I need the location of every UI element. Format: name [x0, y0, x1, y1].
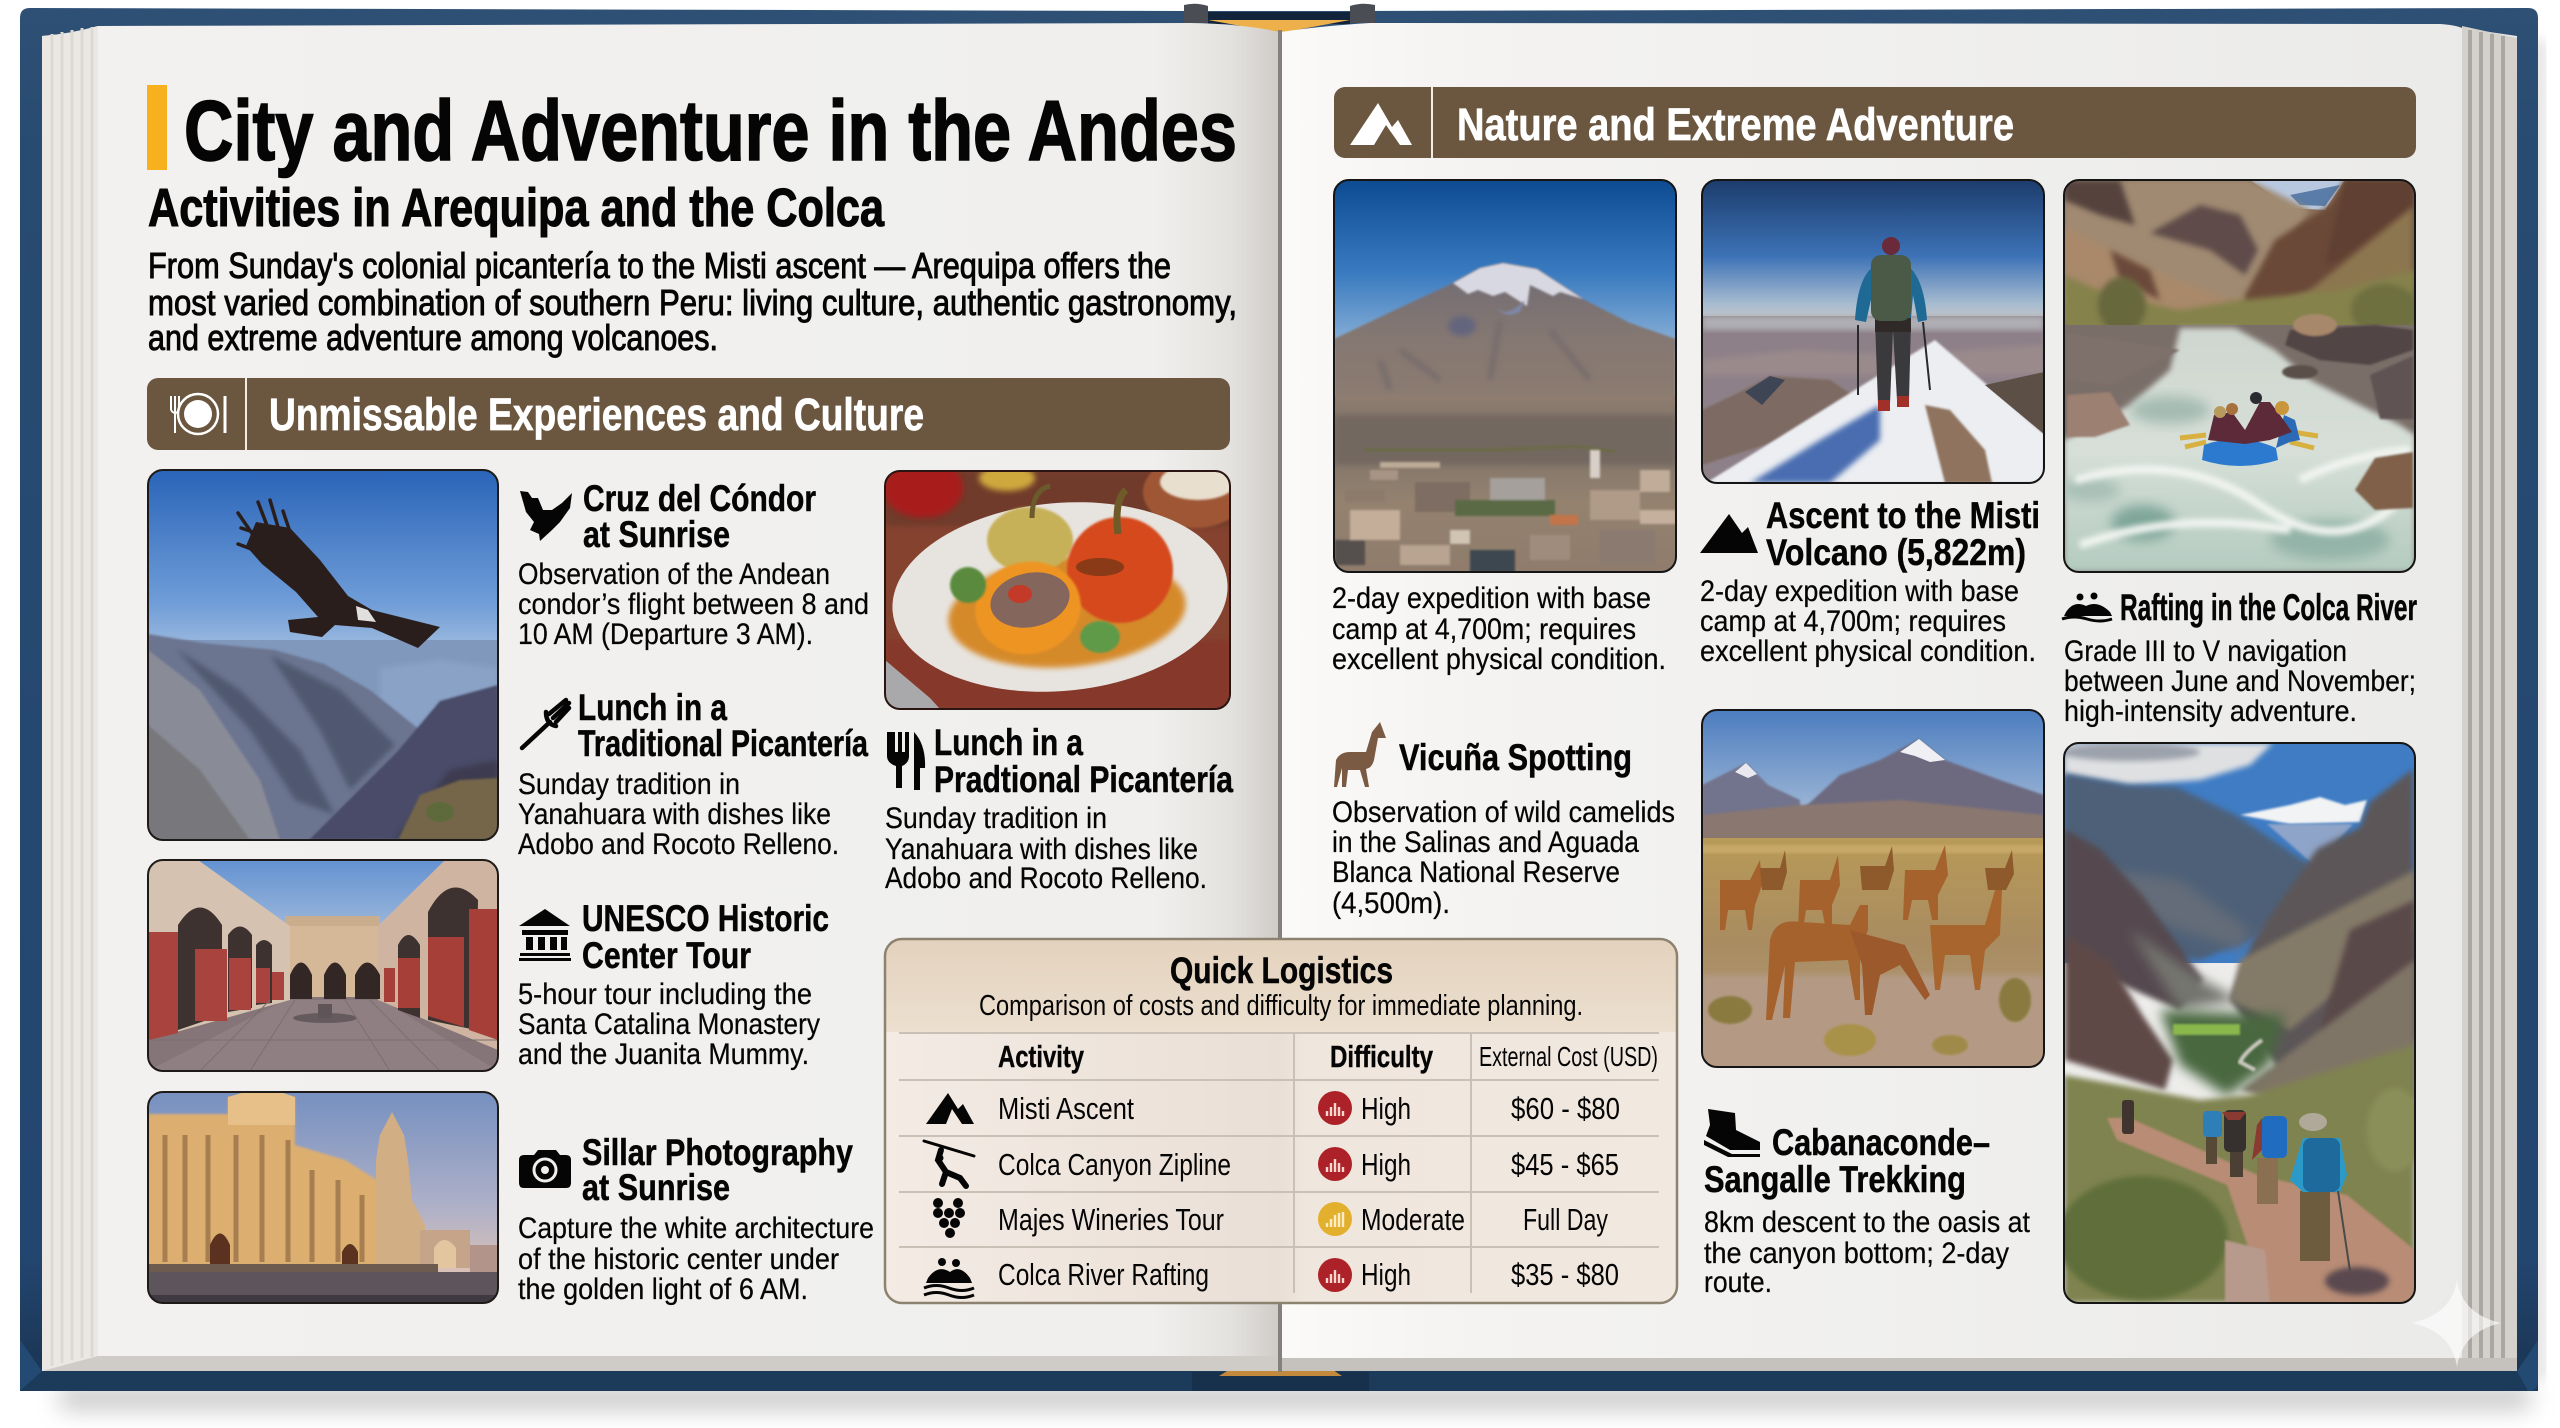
activity: Lunch in a Pradtional Picantería: Adobo and Rocoto Relleno. — [885, 862, 1207, 895]
table header row: Activity — [998, 1039, 1085, 1074]
activity: Ascent to the Misti Volcano — [1700, 495, 2040, 668]
activity: Ascent to the Misti Volcano: Ascent to the Misti — [1766, 495, 2040, 536]
sparkle watermark — [2412, 1280, 2501, 1367]
activity: Misti expedition description: excellent physical condition. — [1332, 643, 1666, 676]
activity: Lunch in a Pradtional Picantería: Yanahuara with dishes like — [885, 833, 1198, 866]
activity: Sillar Photography: the golden light of 6 AM. — [518, 1273, 808, 1306]
activity: UNESCO Historic Center Tour: Santa Catalina Monastery — [518, 1008, 820, 1041]
photo: monastery cloister — [148, 860, 498, 1071]
activity: Cruz del Cóndor: condor’s flight between 8 and — [518, 588, 869, 621]
activity: Vicuña Spotting: Blanca National Reserve — [1332, 856, 1620, 889]
section header: Nature and Extreme Adventure — [1334, 87, 2416, 158]
row: Colca Canyon Zipline: $45 - $65 — [1511, 1147, 1619, 1182]
panel: Quick Logistics table — [885, 939, 1677, 1303]
icon: grapes — [933, 1198, 965, 1238]
activity: Cabanaconde–Sangalle Trekking: 8km descent to the oasis at — [1704, 1206, 2031, 1239]
activity: Lunch in a Traditional Picantería: Adobo and Rocoto Relleno. — [518, 828, 839, 861]
activity: Misti expedition description — [1332, 582, 1666, 676]
icon: snow mountain — [1700, 514, 1758, 553]
activity: Lunch in a Traditional Picantería: Sunday tradition in — [518, 768, 740, 801]
activity: Ascent to the Misti Volcano: excellent physical condition. — [1700, 635, 2036, 668]
right arcade — [398, 888, 478, 1030]
activity: Cruz del Cóndor: Observation of the Andean — [518, 558, 830, 591]
icon: camera — [519, 1150, 571, 1188]
row: Colca Canyon Zipline: Colca Canyon Zipline — [998, 1147, 1231, 1182]
icon: condor — [520, 491, 572, 541]
icon: raft on waves — [924, 1258, 974, 1298]
activity: Ascent to the Misti Volcano: Volcano (5,822m) — [1766, 532, 2026, 573]
activity: Rafting in the Colca River: Rafting in the Colca River — [2120, 587, 2417, 628]
left arcade — [178, 908, 272, 1030]
row: Colca Canyon Zipline: High — [1361, 1147, 1411, 1182]
row: Colca River Rafting — [924, 1257, 1619, 1298]
activity: Cabanaconde–Sangalle Trekking: Sangalle Trekking — [1704, 1159, 1966, 1200]
intro paragraph: From Sunday's colonial picantería to the Misti ascent — Arequipa offers the — [148, 245, 1171, 286]
row: Colca Canyon Zipline — [924, 1141, 1619, 1186]
activity: Lunch in a Traditional Picantería: Traditional Picantería — [578, 723, 868, 764]
row: Colca River Rafting: $35 - $80 — [1511, 1257, 1619, 1292]
section header: Unmissable Experiences and Culture: Unmissable Experiences and Culture — [269, 389, 924, 440]
activity: Vicuña Spotting: Vicuña Spotting — [1399, 737, 1632, 778]
activity: Rafting in the Colca River: high-intensity adventure. — [2064, 695, 2357, 728]
icon: fork and knife — [887, 732, 925, 790]
activity: Cabanaconde–Sangalle Trekking: Cabanaconde– — [1772, 1122, 1990, 1163]
icon: vicuña — [1334, 722, 1386, 787]
spine ribbon and tabs — [1184, 4, 1375, 1376]
activity: Vicuña Spotting: Observation of wild camelids — [1332, 796, 1675, 829]
activity: Misti expedition description: 2-day expedition with base — [1332, 582, 1651, 615]
activity: Cruz del Cóndor: at Sunrise — [583, 514, 730, 555]
row: Misti Ascent — [926, 1091, 1620, 1126]
activity: Sillar Photography: Sillar Photography — [582, 1132, 853, 1173]
row: Misti Ascent: High — [1361, 1091, 1411, 1126]
back arches — [290, 962, 380, 999]
activity: Cabanaconde–Sangalle Trekking: the canyon bottom; 2-day — [1704, 1237, 2009, 1270]
title with accent bar: City and Adventure in the Andes — [184, 84, 1237, 179]
table heading — [979, 950, 1583, 1022]
icon: white mountains — [1350, 103, 1412, 145]
row: Majes Wineries Tour: Majes Wineries Tour — [998, 1202, 1224, 1237]
icon: raft — [2062, 592, 2112, 621]
photo: Misti volcano over Arequipa — [1334, 180, 1676, 572]
table heading: Quick Logistics — [1170, 950, 1393, 991]
activity: Sillar Photography: of the historic center under — [518, 1243, 839, 1276]
activity: Cabanaconde–Sangalle Trekking: route. — [1704, 1266, 1772, 1299]
row: Colca River Rafting: Colca River Rafting — [998, 1257, 1209, 1292]
photo: rafting on Colca river — [2060, 180, 2419, 572]
row: Majes Wineries Tour: Full Day — [1523, 1202, 1608, 1237]
photo: cathedral at sunrise — [148, 1092, 498, 1303]
intro paragraph: most varied combination of southern Peru: living culture, authentic gastronomy, — [148, 282, 1237, 323]
activity: Ascent to the Misti Volcano: 2-day expedition with base — [1700, 575, 2019, 608]
right book page — [1281, 23, 2517, 1371]
hikers — [2122, 1100, 2350, 1271]
table heading: Comparison of costs and difficulty for immediate planning. — [979, 990, 1583, 1022]
activity: Lunch in a Traditional Picantería: Yanahuara with dishes like — [518, 798, 831, 831]
photo: vicuñas on the altiplano — [1702, 710, 2044, 1067]
row: Colca River Rafting: High — [1361, 1257, 1411, 1292]
activity: Rafting in the Colca River: Grade III to V navigation — [2064, 635, 2347, 668]
icon: hiking boot — [1704, 1109, 1760, 1157]
activity: Lunch in a Pradtional Picantería — [885, 722, 1233, 895]
river rocks — [2066, 314, 2413, 510]
table header row — [998, 1039, 1658, 1074]
spine fold — [1278, 30, 1282, 1372]
activity: Sillar Photography: Capture the white architecture — [518, 1212, 874, 1245]
photo: rocoto relleno plate — [886, 472, 1229, 708]
activity: UNESCO Historic Center Tour: and the Juanita Mummy. — [518, 1038, 809, 1071]
intro paragraph: and extreme adventure among volcanoes. — [148, 317, 718, 358]
row: Majes Wineries Tour — [933, 1198, 1608, 1238]
section header: Nature and Extreme Adventure: Nature and Extreme Adventure — [1457, 99, 2014, 150]
activity: Cruz del Cóndor: Cruz del Cóndor — [583, 478, 816, 519]
activity: UNESCO Historic Center Tour: 5-hour tour including the — [518, 978, 812, 1011]
activity: Lunch in a Pradtional Picantería: Lunch in a — [934, 722, 1083, 763]
activity: Sillar Photography — [518, 1132, 874, 1306]
activity: UNESCO Historic Center Tour — [518, 898, 829, 1071]
activity: Vicuña Spotting: in the Salinas and Aguada — [1332, 826, 1639, 859]
activity: Rafting in the Colca River — [2062, 587, 2417, 728]
activity: Cruz del Cóndor — [518, 478, 869, 651]
intro paragraph — [148, 245, 1237, 358]
icon: fork — [522, 700, 569, 748]
photo: condor over canyon — [148, 470, 498, 840]
activity: UNESCO Historic Center Tour: Center Tour — [582, 935, 751, 976]
left book page — [42, 23, 1279, 1371]
activity: Rafting in the Colca River: between June and November; — [2064, 665, 2416, 698]
row: Misti Ascent: Misti Ascent — [998, 1091, 1134, 1126]
subtitle: Activities in Arequipa and the Colca — [148, 178, 885, 238]
icon: plate and cutlery — [171, 394, 225, 434]
activity: Cabanaconde–Sangalle Trekking — [1704, 1109, 2031, 1299]
icon: mountain — [926, 1093, 974, 1124]
raft — [2180, 392, 2318, 466]
activity: UNESCO Historic Center Tour: UNESCO Historic — [582, 898, 829, 939]
activity: Lunch in a Traditional Picantería — [518, 687, 868, 861]
activity: Misti expedition description: camp at 4,700m; requires — [1332, 613, 1636, 646]
activity: Vicuña Spotting — [1332, 722, 1675, 920]
icon: zipline — [924, 1141, 974, 1186]
icon: temple — [519, 909, 571, 961]
condor — [238, 500, 440, 648]
activity: Cruz del Cóndor: 10 AM (Departure 3 AM). — [518, 618, 813, 651]
activity: Vicuña Spotting: (4,500m). — [1332, 887, 1450, 920]
activity: Lunch in a Pradtional Picantería: Pradtional Picantería — [934, 759, 1233, 800]
activity: Lunch in a Pradtional Picantería: Sunday tradition in — [885, 802, 1107, 835]
vicuñas — [1720, 845, 2014, 1020]
table header row: Difficulty — [1330, 1039, 1434, 1074]
activity: Lunch in a Traditional Picantería: Lunch in a — [578, 687, 727, 728]
row: Majes Wineries Tour: Moderate — [1361, 1202, 1465, 1237]
section header: Unmissable Experiences and Culture — [147, 378, 1230, 450]
activity: Sillar Photography: at Sunrise — [582, 1167, 730, 1208]
row: Misti Ascent: $60 - $80 — [1511, 1091, 1620, 1126]
table header row: External Cost (USD) — [1479, 1041, 1658, 1072]
photo: hiker on snowy ridge — [1702, 180, 2044, 484]
hiker — [1855, 237, 1930, 411]
activity: Ascent to the Misti Volcano: camp at 4,700m; requires — [1700, 605, 2006, 638]
photo: trekkers in Colca Canyon — [2058, 743, 2423, 1303]
